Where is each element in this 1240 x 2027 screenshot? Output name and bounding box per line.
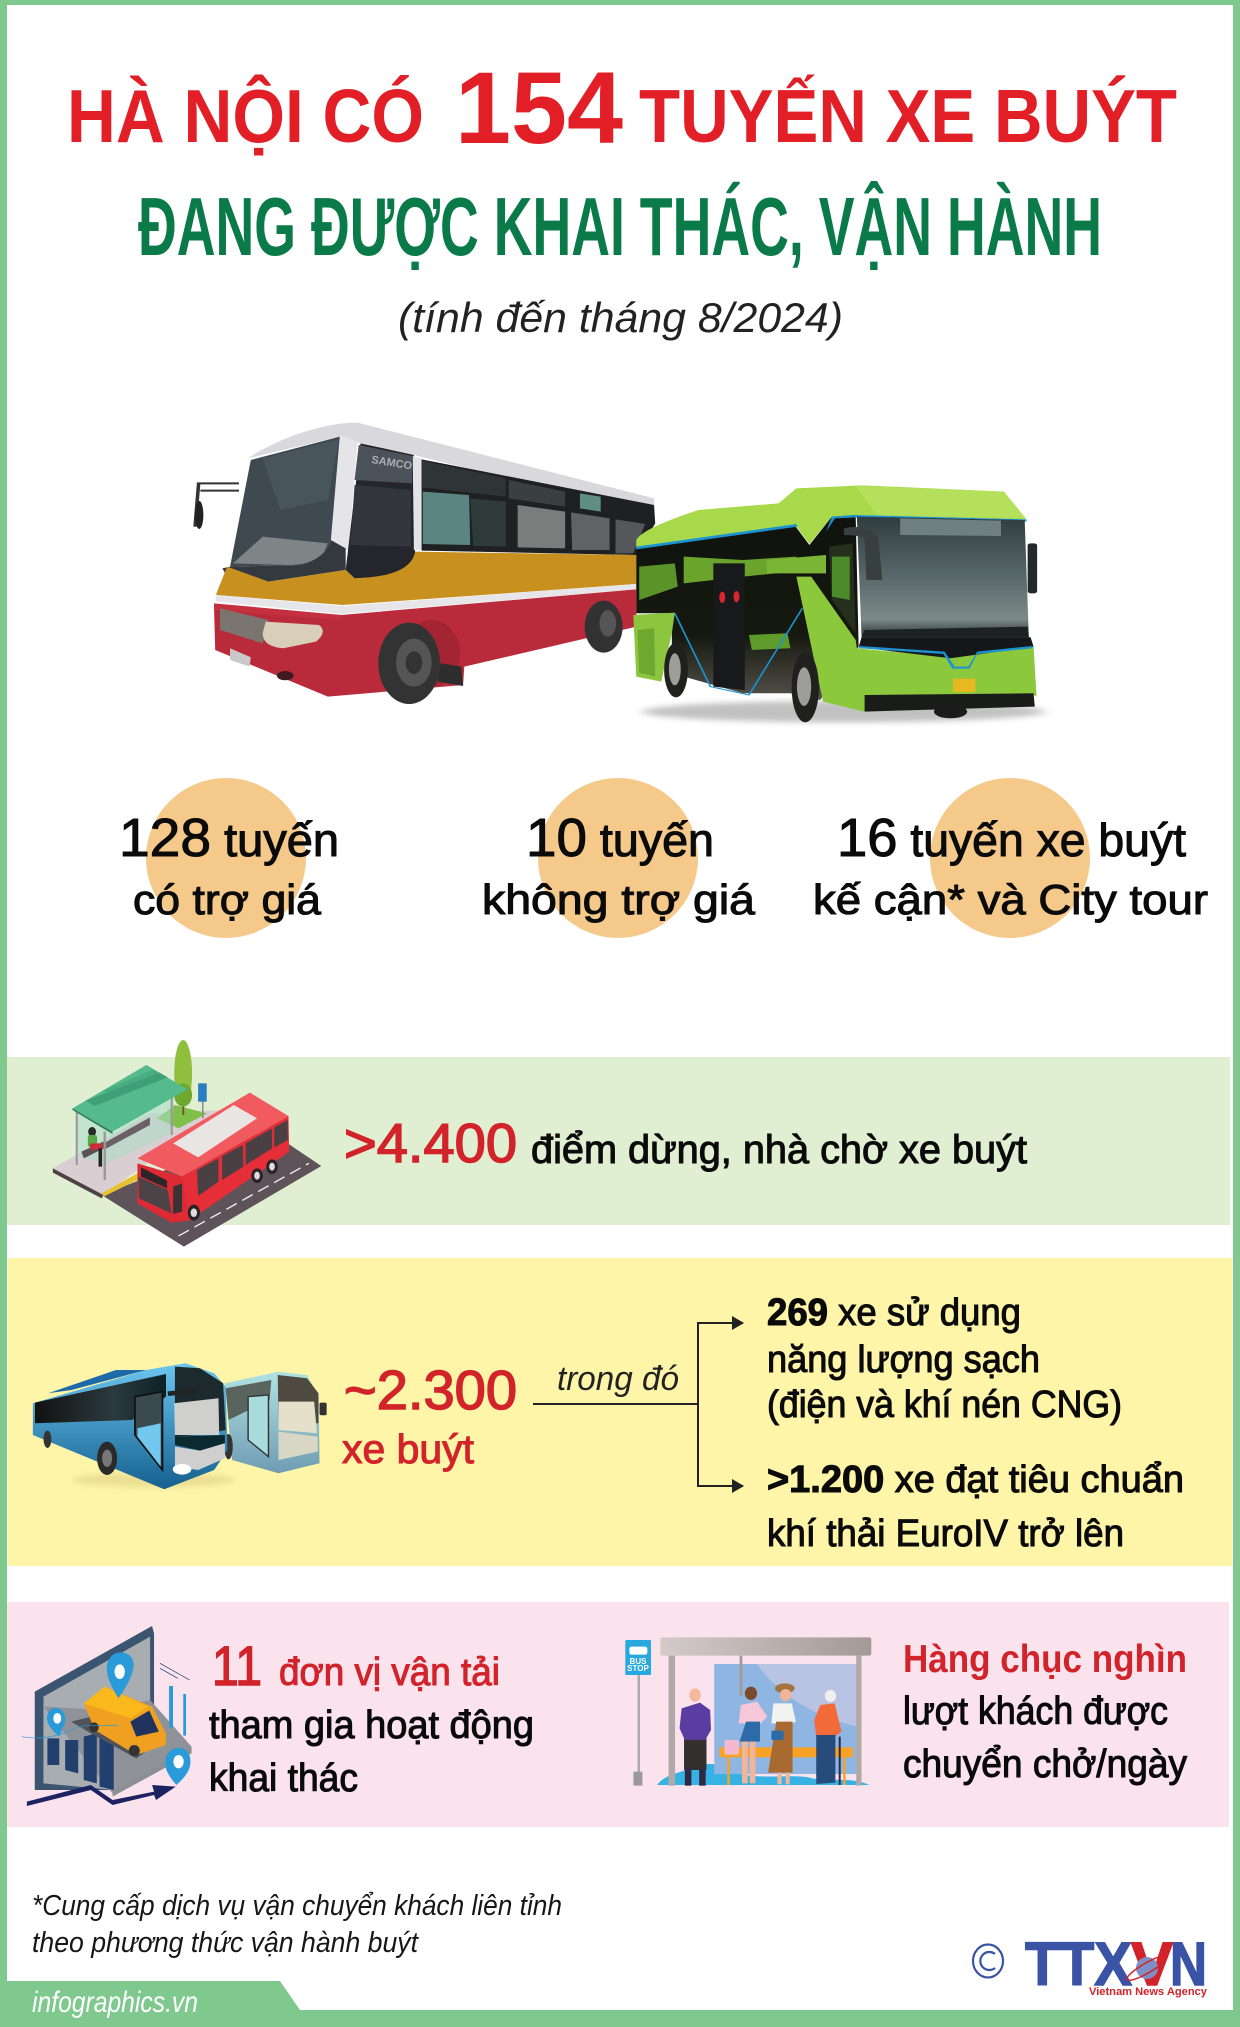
bus lettering: SAMCO — [371, 454, 413, 472]
agency wordmark: V — [1131, 1930, 1173, 1998]
title line 1: TUYẾN XE BUÝT — [639, 74, 1177, 158]
stat: 10 routes: không trợ giá — [482, 876, 756, 923]
footnote — [32, 1890, 562, 1959]
stat: 10 routes — [482, 778, 756, 938]
EuroIV buses: >1.200 xe đạt tiêu chuẩn — [767, 1459, 1184, 1501]
icon: bus stop with red bus — [53, 1040, 321, 1247]
stops figure: điểm dừng, nhà chờ xe buýt — [531, 1128, 1027, 1172]
arrows — [533, 1316, 744, 1493]
stat: 10 routes: 10 tuyến — [526, 808, 714, 868]
logo: TTXVN — [973, 1930, 1208, 1998]
EuroIV buses — [767, 1459, 1184, 1555]
title line 1: HÀ NỘI CÓ — [67, 74, 424, 158]
stat: 16 routes: 16 tuyến xe buýt — [837, 808, 1186, 868]
copyright mark — [973, 1944, 1003, 1978]
operators text: đơn vị vận tải — [279, 1651, 500, 1694]
stat: 16 routes — [813, 778, 1208, 938]
stat: 128 routes: có trợ giá — [133, 876, 322, 923]
stops figure — [344, 1112, 1027, 1174]
agency wordmark: TTX — [1025, 1930, 1132, 1998]
title — [67, 51, 1177, 341]
agency wordmark: N — [1170, 1930, 1207, 1998]
panel: bus fleet — [8, 1258, 1232, 1566]
red and yellow bus — [195, 423, 655, 704]
stat: 128 routes — [119, 778, 339, 938]
panel: operators and passengers — [7, 1602, 1229, 1827]
fleet figure: xe buýt — [342, 1426, 475, 1472]
agency wordmark — [1025, 1930, 1208, 1998]
footer source: infographics.vn — [32, 1986, 198, 2019]
operators text: tham gia hoạt động — [209, 1704, 534, 1747]
footnote: theo phương thức vận hành buýt — [32, 1927, 420, 1959]
stops figure: >4.400 — [344, 1112, 517, 1174]
operators text — [209, 1634, 534, 1800]
icon: two blue buses — [33, 1363, 327, 1489]
agency wordmark: Vietnam News Agency — [1089, 1986, 1208, 1998]
passengers text: chuyển chở/ngày — [903, 1743, 1187, 1786]
icon: passengers at bus stop: STOP — [627, 1664, 649, 1673]
clean energy buses: (điện và khí nén CNG) — [767, 1384, 1122, 1426]
operators text: 11 — [212, 1634, 262, 1697]
subtitle: (tính đến tháng 8/2024) — [398, 294, 843, 341]
footnote: *Cung cấp dịch vụ vận chuyển khách liên tỉnh — [32, 1890, 562, 1922]
stat: 128 routes: 128 tuyến — [119, 808, 339, 868]
icon: logistics monitor — [22, 1626, 192, 1806]
clean energy buses — [767, 1292, 1122, 1426]
ground shadow — [642, 701, 1045, 722]
passengers text: Hàng chục nghìn — [903, 1638, 1187, 1681]
label: among which: trong đó — [557, 1360, 679, 1398]
title line 1 — [67, 51, 1177, 165]
operators text: khai thác — [209, 1757, 358, 1800]
fleet figure: ~2.300 — [344, 1359, 517, 1421]
clean energy buses: 269 xe sử dụng — [767, 1292, 1021, 1334]
fleet figure — [342, 1359, 517, 1472]
icon: passengers at bus stop: BUS — [630, 1657, 647, 1666]
EuroIV buses: khí thải EuroIV trở lên — [767, 1513, 1124, 1555]
stat: 16 routes: kế cận* và City tour — [813, 876, 1208, 923]
panel: bus stops — [7, 1040, 1230, 1247]
icon: passengers at bus stop — [625, 1637, 871, 1786]
clean energy buses: năng lượng sạch — [767, 1339, 1040, 1381]
green electric bus — [633, 485, 1037, 722]
illustration: two buses — [195, 423, 1045, 722]
passengers text: lượt khách được — [903, 1690, 1168, 1733]
title line 1: 154 — [455, 51, 623, 165]
passengers text — [903, 1638, 1187, 1786]
